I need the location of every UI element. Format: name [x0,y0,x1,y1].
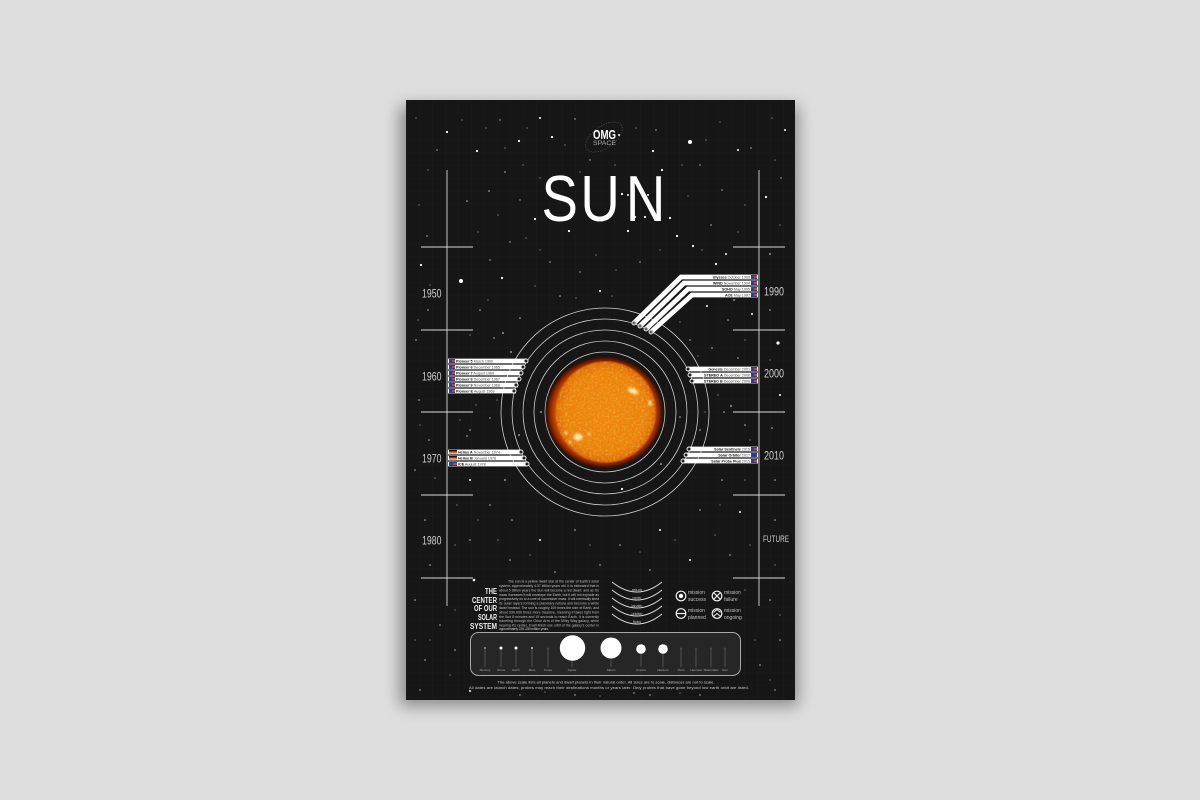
footnote: All dates are launch dates; probes may reach their destinations months or years later. Only probes that have gone beyond low earth orbit are listed. [469,685,749,690]
text block: about the sun: dwarf instead. The sun is roughly 109 times the size of Earth, and [499,606,599,610]
panel: poster [406,100,795,700]
panel: planet scale: Haumea [690,668,702,672]
decade labels: left: 1960 [422,370,442,384]
panel: planet scale: Mercury [480,668,491,672]
panel: planet scale: Makemake [704,668,719,672]
planets [484,635,725,661]
text block: about the sun: about 330,000 times more massive, meaning it takes light from [499,610,599,614]
orbit rings [501,308,709,516]
text block: about the sun: traveling through the Orion Arm of the Milky Way galaxy, while [499,619,599,623]
sun [546,356,664,468]
missions: 2000s: Genesis December 2001 [708,367,750,371]
missions: 1990s diagonal bundle [632,275,758,334]
missions: 1990s diagonal bundle: WIND November 1994 [713,281,750,285]
timeline: right axis [733,170,785,606]
panel: planet scale [470,632,740,676]
footnote: The above scale lists all planets and dwarf planets in their natural order. All sizes are to scale, distances are not to scale. [498,680,714,684]
panel: planet scale: Neptune [657,668,669,672]
heading: the center of our solar system: THE [485,587,497,596]
missions: 1960s: Pioneer 8 December 1967 [456,377,500,381]
legend: mission types arcs: return [632,587,642,592]
icon: mission ongoing: ongoing [724,615,742,621]
text block: about the sun: system, approximately 4.57 billion years old. It is estimated that in [499,584,599,588]
title: U [580,163,620,235]
missions: 1960s [448,359,528,393]
decade labels: left: 1970 [422,452,442,466]
missions: 1960s: Pioneer 6 December 1965 [456,365,500,369]
heading: the center of our solar system: SOLAR [478,613,497,622]
title: S [542,163,578,235]
missions: 1970s: ICE August 1978 [458,462,486,466]
logo: OMG SPACE: SPACE [593,141,616,147]
decade labels: left: 1950 [422,286,442,300]
decade labels: left: 1980 [422,534,442,548]
icon: mission ongoing: mission [724,608,741,614]
panel: planet scale: Mars [529,668,536,672]
missions: 2000s [686,367,758,383]
missions: 1960s: Pioneer 7 August 1966 [456,371,494,375]
text block: about the sun: nearing it's center, it will finish one orbit of the galaxy's center in [499,624,599,628]
missions: 2000s: STEREO B December 2006 [704,379,750,383]
icon: mission failure [712,590,741,603]
missions: 2010s: Solar Probe Plus 2015 [711,459,750,463]
missions: 1960s: Pioneer 9 November 1968 [456,383,500,387]
icon: mission planned: mission [688,608,705,614]
heading: the center of our solar system: CENTER [472,596,497,605]
decade labels: right [763,284,789,544]
title: N [626,163,665,235]
missions: 1970s: Helios B January 1976 [458,456,496,460]
missions: 1960s: Pioneer E August 1969 [456,389,495,393]
missions: 2010s [681,447,758,463]
panel: planet scale: Saturn [607,668,616,672]
missions: 2010s: Solar Sentinels 2015 [714,447,750,451]
missions: 1970s: Helios A November 1974 [458,450,500,454]
heading: the center of our solar system [470,587,497,631]
icon: mission planned [676,608,706,621]
icon: mission success [676,590,707,603]
icon: mission planned: planned [688,615,706,621]
legend: mission types arcs: rover [632,595,642,600]
legend: mission types arcs [612,582,662,624]
missions: 1970s [448,450,529,466]
missions: 1960s: Pioneer 5 March 1960 [456,359,493,363]
text block: about the sun: the Sun 8 minutes and 19 seconds to reach Earth. It is currently [499,615,599,619]
decade labels: right: 1990 [764,284,784,298]
footnote [469,680,749,690]
legend: mission types arcs: orbiter [631,611,643,616]
text block: about the sun: its outer layers forming a planetary nebula and become a white [499,602,599,606]
heading: the center of our solar system: OF OUR [474,604,497,613]
text block: about the sun: The sun is a yellow dwarf star at the center of Earth's solar [508,580,600,584]
panel: planet scale: Eris [722,668,728,672]
decade labels: right: FUTURE [763,534,789,544]
legend: mission types arcs: flyby [633,619,641,624]
icon: mission success: success [688,597,707,603]
star field [414,117,786,697]
panel: planet scale: Uranus [636,668,646,672]
text block: about the sun: approximately 225–250 million years. [499,627,549,631]
panel: planet scale: Venus [497,668,506,672]
icon: mission failure: failure [724,597,738,603]
decade labels: left [422,286,442,548]
missions: 1990s diagonal bundle: ACE May 1997 [725,293,750,297]
missions: 1990s diagonal bundle: Ulysses October 1990 [713,275,750,279]
panel: planet scale: Pluto [678,668,685,672]
panel: planet scale: Jupiter [567,668,577,672]
icon: mission failure: mission [724,590,741,596]
legend: mission types arcs: lander [631,603,643,608]
text block: about the sun [499,580,600,631]
icon: mission success: mission [688,590,705,596]
poster shadow [400,106,798,706]
logo: OMG SPACE: OMG [593,128,616,142]
text block: about the sun: mass increases it will envelope the Earth, but it will not explode as [499,593,599,597]
heading: the center of our solar system: SYSTEM [470,622,497,631]
decade labels: right: 2010 [764,448,784,462]
missions: 2010s: Solar Orbiter 2017 [718,453,750,457]
timeline: left axis [421,170,473,606]
panel: planet scale: Earth [512,668,520,672]
missions: 1990s diagonal bundle: SOHO May 1995 [722,287,750,291]
missions: 2000s: STEREO A December 2006 [704,373,750,377]
text block: about the sun: progressively on to a core of successive mass. It will eventually shed [499,597,599,601]
panel: planet scale: Ceres [544,668,552,672]
icon: mission ongoing [712,608,742,621]
decade labels: right: 2000 [764,366,784,380]
text block: about the sun: about 5 billion years the Sun will become a red dwarf, and as it's [499,588,599,592]
logo: OMG SPACE [580,116,628,158]
